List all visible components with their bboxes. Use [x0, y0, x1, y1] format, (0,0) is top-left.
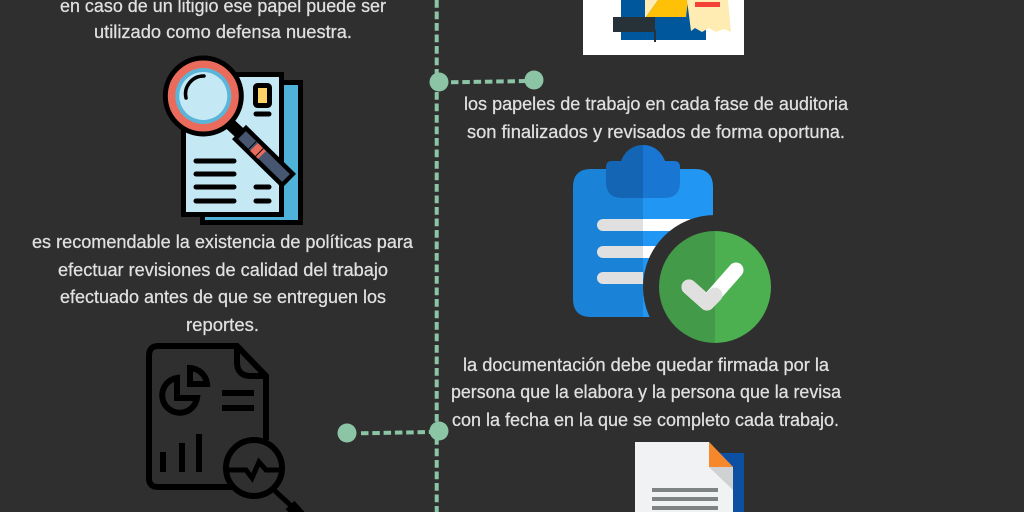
text block: revisiones de calidad: efectuar revisiones de calidad del trabajo: [58, 260, 388, 280]
text block: revisiones de calidad: [32, 232, 414, 335]
text block: revisiones de calidad: reportes.: [186, 315, 259, 335]
icon: clipboard with check mark: [573, 145, 787, 359]
icon: documents under magnifying glass: [165, 58, 300, 222]
text block: defensa en litigio: [60, 0, 386, 42]
text block: revisiones de calidad: es recomendable la existencia de políticas para: [32, 232, 414, 252]
text block: papeles finalizados: son finalizados y revisados de forma oportuna.: [467, 122, 845, 142]
icon: document with folded corner: [635, 442, 744, 512]
text block: documentación firmada: [451, 355, 842, 430]
timeline: vertical dashed line with connectors: [338, 0, 544, 512]
icon: report with charts and magnifier: [149, 346, 302, 512]
text block: papeles finalizados: [464, 94, 849, 142]
text block: defensa en litigio: utilizado como defensa nuestra.: [94, 22, 352, 42]
text block: papeles finalizados: los papeles de trabajo en cada fase de auditoria: [464, 94, 849, 114]
image card: document illustration (top): [583, 0, 744, 55]
text block: documentación firmada: con la fecha en la que se completo cada trabajo.: [452, 410, 839, 430]
text block: documentación firmada: persona que la elabora y la persona que la revisa: [451, 382, 842, 402]
text block: documentación firmada: la documentación debe quedar firmada por la: [463, 355, 830, 375]
text block: revisiones de calidad: efectuado antes de que se entreguen los: [60, 287, 386, 307]
